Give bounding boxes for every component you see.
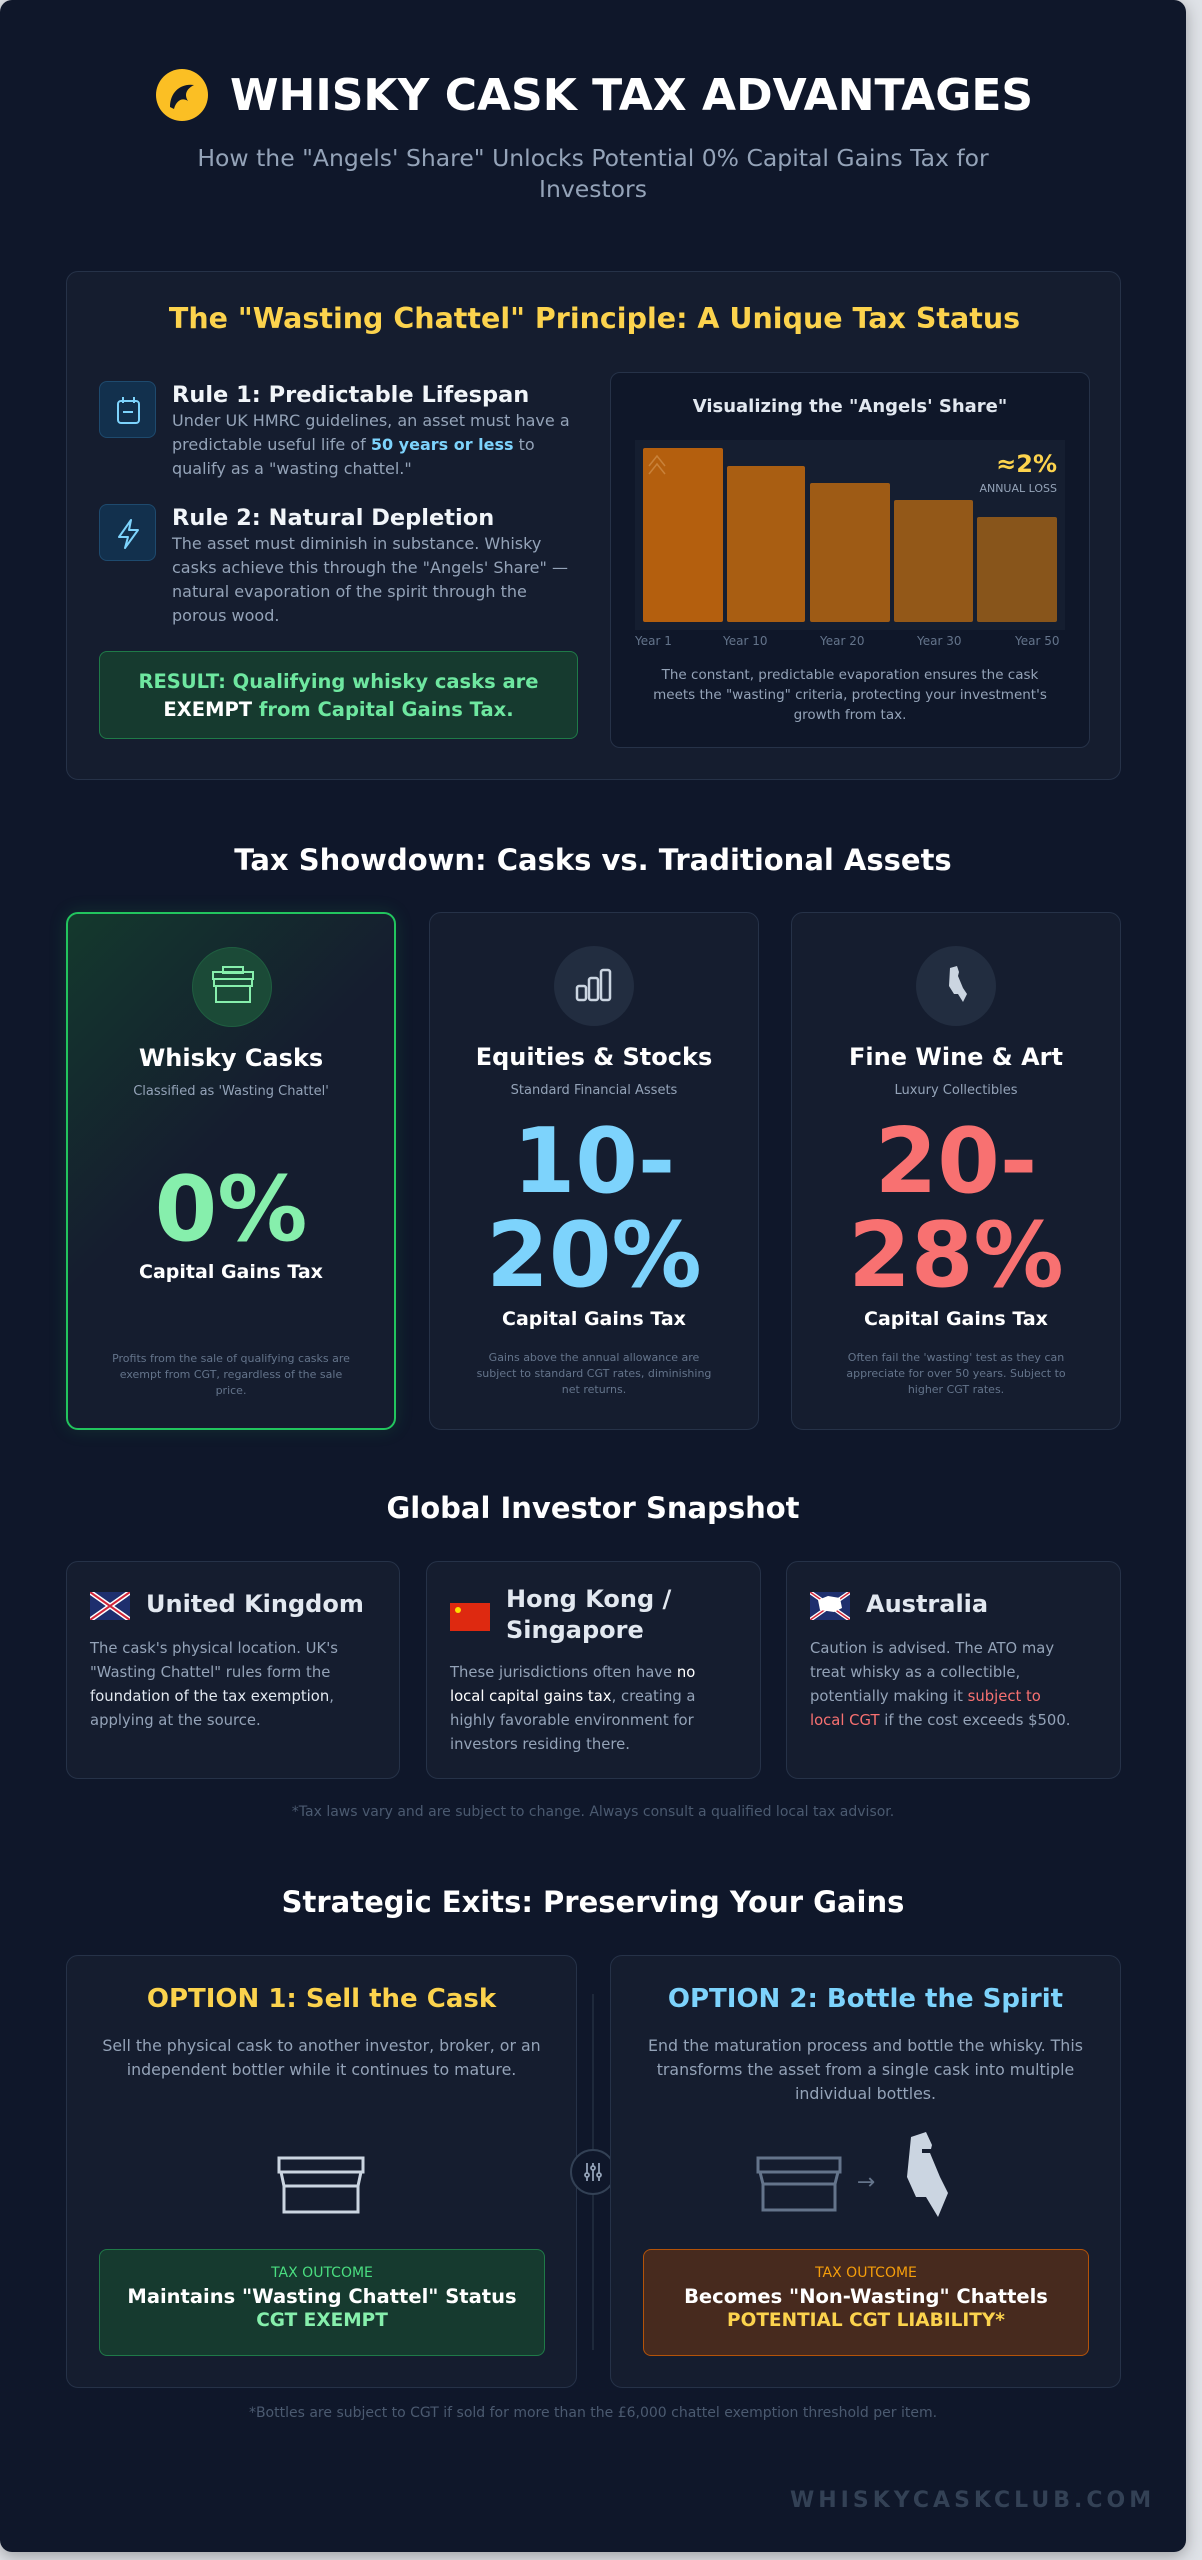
small text: higher CGT rates.: [908, 1383, 1004, 1396]
card name: Equities & Stocks: [476, 1043, 712, 1071]
title: WHISKY CASK TAX ADVANTAGES: [230, 70, 1033, 121]
outcome box: TAX OUTCOME: [815, 2265, 917, 2281]
option 1 text: [102, 2036, 541, 2079]
small text: Often fail the 'wasting' test as they can: [848, 1351, 1064, 1364]
HK text: These jurisdictions often have no: [450, 1664, 695, 1681]
year labels: Year 50: [1015, 634, 1060, 648]
AU text: [810, 1640, 1070, 1729]
rule 1: [99, 381, 570, 478]
brand: WHISKYCASKCLUB.COM: [790, 2488, 1155, 2513]
small text: Profits from the sale of qualifying casks are: [112, 1352, 350, 1365]
AU text: potentially making it subject to: [810, 1688, 1041, 1705]
icon: HK flag: [450, 1603, 490, 1631]
rule 2 text: The asset must diminish in substance. Whisky: [172, 534, 541, 553]
outcome box: CGT EXEMPT: [256, 2310, 388, 2331]
HK text: highly favorable environment for: [450, 1712, 694, 1729]
outcome box: POTENTIAL CGT LIABILITY*: [727, 2310, 1005, 2331]
card: Australia: [786, 1561, 1121, 1779]
small text: [477, 1351, 711, 1396]
small text: exempt from CGT, regardless of the sale: [120, 1368, 342, 1381]
chart caption: The constant, predictable evaporation ensures the cask: [662, 667, 1038, 683]
bar chart: [635, 440, 1065, 630]
small text: [846, 1351, 1066, 1396]
HK text: investors residing there.: [450, 1736, 630, 1753]
rule 1 text: Under UK HMRC guidelines, an asset must have a: [172, 411, 570, 430]
card subtitle: Luxury Collectibles: [894, 1083, 1018, 1098]
year labels: [635, 634, 1060, 648]
rule 1 text: qualify as a "wasting chattel.": [172, 459, 412, 478]
option 2 text: transforms the asset from a single cask into multiple: [657, 2060, 1074, 2079]
option 2 text: End the maturation process and bottle the whisky. This: [648, 2036, 1083, 2055]
icon: bar chart: [554, 946, 634, 1026]
AU text: local CGT if the cost exceeds $500.: [810, 1712, 1070, 1729]
bar chart: ANNUAL LOSS: [979, 482, 1057, 495]
footnote: tax laws: *Tax laws vary and are subject to change. Always consult a qualified local tax advisor.: [292, 1804, 894, 1820]
small text: Gains above the annual allowance are: [489, 1351, 699, 1364]
icon: AU flag: [810, 1592, 850, 1620]
option 2 text: [648, 2036, 1083, 2103]
chart panel: [610, 372, 1090, 748]
icon: UK flag: [90, 1592, 130, 1620]
card name: Whisky Casks: [139, 1044, 323, 1072]
year labels: Year 1: [635, 634, 672, 648]
panel: option 2: [610, 1955, 1121, 2388]
card subtitle: Classified as 'Wasting Chattel': [133, 1084, 329, 1099]
chart caption: meets the "wasting" criteria, protecting your investment's: [653, 687, 1047, 703]
small text: price.: [216, 1384, 246, 1397]
panel: wasting chattel principle: [66, 271, 1121, 780]
rule 2 heading: Rule 2: Natural Depletion: [172, 505, 494, 531]
rule 2 text: [172, 534, 568, 625]
panel: option 1: [66, 1955, 577, 2388]
subtitle: How the "Angels' Share" Unlocks Potential 0% Capital Gains Tax for: [197, 144, 989, 172]
label: Capital Gains Tax: [139, 1261, 323, 1283]
big number: 0%: [155, 1157, 307, 1262]
icon: calendar: [99, 381, 156, 438]
HK title: [506, 1585, 672, 1644]
icon: logo: [156, 69, 208, 121]
heading: global snapshot: Global Investor Snapshot: [386, 1491, 800, 1525]
UK text: [90, 1640, 338, 1729]
rule 2 text: natural evaporation of the spirit through the: [172, 582, 527, 601]
rule 1 text: predictable useful life of 50 years or less to: [172, 435, 535, 454]
card: HK / Singapore: [426, 1561, 761, 1779]
big number: 20-: [875, 1109, 1037, 1214]
rule 2 text: porous wood.: [172, 606, 279, 625]
small text: [112, 1352, 350, 1397]
label: Capital Gains Tax: [502, 1308, 686, 1330]
card subtitle: Standard Financial Assets: [511, 1083, 677, 1098]
big number: 20%: [486, 1203, 702, 1308]
option 1 title: OPTION 1: Sell the Cask: [147, 1984, 496, 2014]
chart caption: [653, 667, 1047, 723]
option 2 title: OPTION 2: Bottle the Spirit: [668, 1984, 1063, 2014]
big number: [486, 1109, 702, 1308]
option 1 text: independent bottler while it continues to mature.: [127, 2060, 516, 2079]
HK title: Singapore: [506, 1616, 644, 1644]
UK text: foundation of the tax exemption,: [90, 1688, 334, 1705]
panel title: The "Wasting Chattel" Principle: A Unique Tax Status: [169, 302, 1020, 335]
UK text: The cask's physical location. UK's: [90, 1640, 338, 1657]
big number: 28%: [848, 1203, 1064, 1308]
year labels: Year 20: [820, 634, 864, 648]
card: wine & art: [791, 912, 1121, 1430]
HK title: Hong Kong /: [506, 1585, 671, 1613]
big number: 10-: [513, 1109, 675, 1214]
HK text: local capital gains tax, creating a: [450, 1688, 696, 1705]
footnote: bottles: *Bottles are subject to CGT if sold for more than the £6,000 chattel exemption threshold per item.: [249, 2405, 937, 2421]
year labels: Year 10: [723, 634, 768, 648]
chart caption: growth from tax.: [794, 707, 906, 723]
big number: [848, 1109, 1064, 1308]
heading: strategic exits: Strategic Exits: Preserving Your Gains: [282, 1885, 904, 1919]
option 1 text: Sell the physical cask to another investor, broker, or an: [102, 2036, 541, 2055]
rule 2: [99, 504, 568, 625]
small text: net returns.: [562, 1383, 626, 1396]
outcome box: TAX OUTCOME: [271, 2265, 373, 2281]
icon: cask to bottle: [756, 2132, 948, 2217]
UK text: "Wasting Chattel" rules form the: [90, 1664, 330, 1681]
year labels: Year 30: [917, 634, 962, 648]
small text: subject to standard CGT rates, diminishing: [477, 1367, 711, 1380]
AU text: Caution is advised. The ATO may: [810, 1640, 1054, 1657]
outcome box: [643, 2249, 1089, 2356]
icon: cask to bottle: →: [857, 2170, 875, 2195]
card: UK: [66, 1561, 400, 1779]
rule 1 text: [172, 411, 570, 478]
header: [156, 69, 1033, 121]
chart title: Visualizing the "Angels' Share": [693, 396, 1007, 417]
result box: EXEMPT from Capital Gains Tax.: [163, 698, 514, 721]
AU text: treat whisky as a collectible,: [810, 1664, 1020, 1681]
outcome box: Maintains "Wasting Chattel" Status: [127, 2285, 517, 2308]
option 2 text: individual bottles.: [795, 2084, 936, 2103]
subtitle: [197, 144, 989, 203]
outcome box: [99, 2249, 545, 2356]
bar chart: ≈2%: [996, 450, 1057, 478]
card: whisky casks: [66, 912, 396, 1430]
subtitle: Investors: [539, 175, 647, 203]
AU title: Australia: [866, 1590, 988, 1618]
label: Capital Gains Tax: [864, 1308, 1048, 1330]
small text: appreciate for over 50 years. Subject to: [846, 1367, 1066, 1380]
icon: cask: [192, 947, 272, 1027]
icon: lightning: [99, 504, 156, 561]
result box: RESULT: Qualifying whisky casks are: [138, 670, 539, 693]
icon: cask: [278, 2156, 364, 2214]
heading: tax showdown: Tax Showdown: Casks vs. Traditional Assets: [234, 843, 952, 877]
icon: bottle: [916, 946, 996, 1026]
card name: Fine Wine & Art: [849, 1043, 1063, 1071]
outcome box: Becomes "Non-Wasting" Chattels: [684, 2285, 1048, 2308]
rule 2 text: casks achieve this through the "Angels' Share" —: [172, 558, 568, 577]
card: equities: [429, 912, 759, 1430]
divider icon: [570, 1994, 610, 2350]
rule 1 heading: Rule 1: Predictable Lifespan: [172, 382, 529, 408]
result box: [99, 651, 578, 739]
HK text: [450, 1664, 696, 1753]
UK title: United Kingdom: [146, 1590, 364, 1618]
UK text: applying at the source.: [90, 1712, 261, 1729]
